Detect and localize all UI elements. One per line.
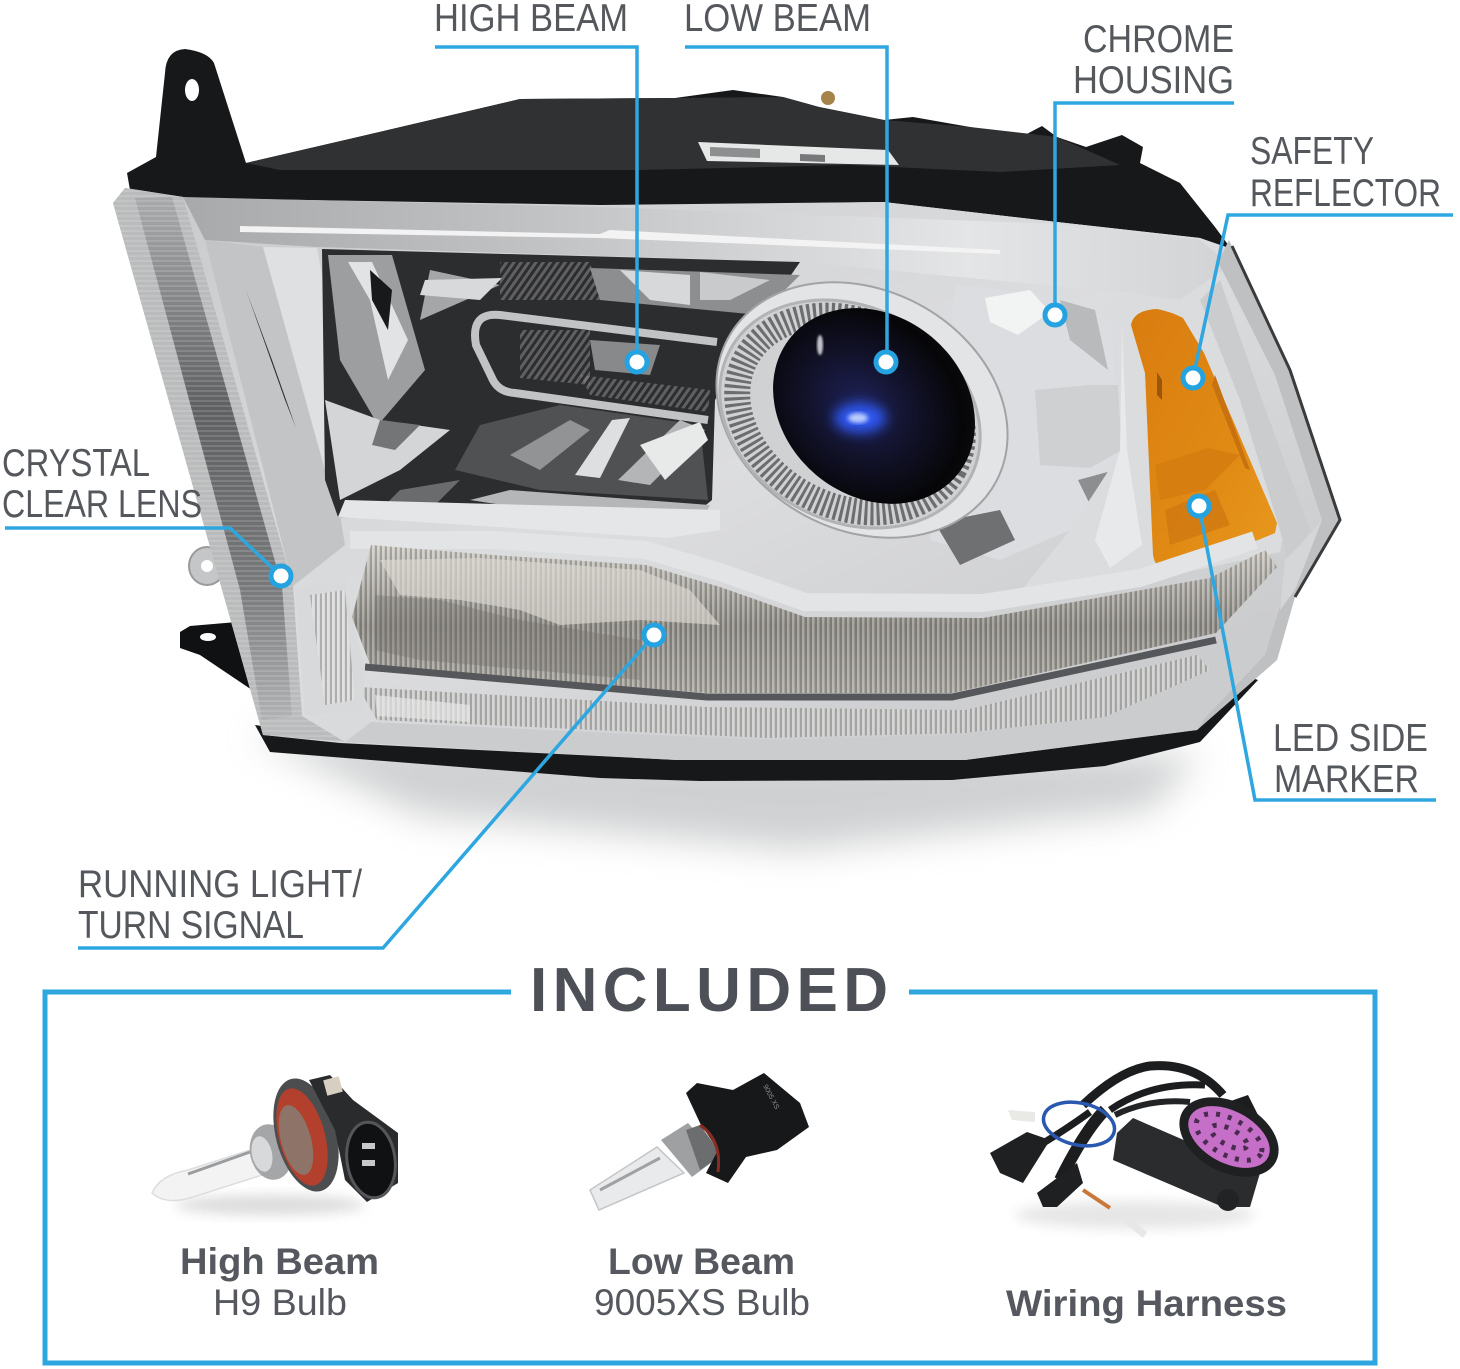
label: chrome housing: HOUSING bbox=[1073, 59, 1234, 102]
label: safety reflector bbox=[1183, 130, 1453, 388]
label: crystal clear lens: CRYSTAL bbox=[2, 442, 150, 485]
caption: 9005XS bulb: 9005XS Bulb bbox=[594, 1282, 810, 1323]
icon: 9005XS bulb bbox=[590, 1073, 809, 1210]
lower black trim bbox=[255, 670, 1258, 781]
right bezel bbox=[1020, 290, 1290, 592]
projector outer ring bbox=[671, 233, 1053, 587]
label: crystal clear lens bbox=[2, 442, 291, 586]
right rim edge bbox=[1197, 240, 1340, 730]
caption: high beam: High Beam bbox=[180, 1241, 379, 1282]
heading: included: INCLUDED bbox=[530, 956, 888, 1025]
amber safety reflector bbox=[1131, 309, 1277, 566]
label: crystal clear lens: CLEAR LENS bbox=[2, 483, 202, 526]
lower bezel sweep band bbox=[350, 540, 1255, 603]
label: LED side marker: MARKER bbox=[1274, 758, 1419, 801]
item: low beam bulb bbox=[590, 1073, 810, 1323]
strip lower dark line bbox=[365, 640, 1216, 697]
upper chrome reflections bbox=[420, 270, 500, 320]
reflector bottom chrome edge bbox=[338, 500, 720, 538]
projector striated ring bbox=[680, 256, 1020, 572]
label: chrome housing: CHROME bbox=[1083, 18, 1234, 61]
projector lens bbox=[733, 268, 1015, 544]
label: LED side marker: LED SIDE bbox=[1273, 717, 1428, 760]
high beam chrome tube bbox=[475, 315, 717, 420]
bottom chrome bar bbox=[345, 610, 1277, 760]
ground shadow bbox=[250, 735, 1200, 850]
label: running light / turn signal bbox=[78, 625, 664, 948]
inner reflector bbox=[520, 330, 590, 385]
icon: wiring harness bbox=[990, 1066, 1292, 1235]
left lens bars bbox=[296, 580, 365, 715]
label sticker bbox=[698, 142, 899, 165]
icon: 9005XS bulb: 9005 XS bbox=[761, 1084, 780, 1111]
label: running light / turn signal: RUNNING LIGHT/ bbox=[78, 863, 362, 906]
lower clear strip bbox=[358, 655, 1210, 738]
icon: H9 bulb bbox=[152, 1071, 400, 1215]
label: low beam bbox=[684, 0, 896, 372]
lower blades bbox=[455, 405, 708, 500]
left lens strip bbox=[113, 188, 345, 742]
reflector cavity bbox=[322, 249, 800, 537]
left mounting ear bbox=[189, 547, 225, 585]
LED running strip bbox=[352, 545, 1277, 693]
projector housing right side bbox=[930, 285, 1124, 565]
label: LED side marker bbox=[1189, 496, 1436, 801]
caption: low beam: Low Beam bbox=[608, 1241, 795, 1282]
panel: included bbox=[45, 956, 1375, 1363]
clear lens and bezel base bbox=[113, 188, 1340, 760]
panel frame bbox=[45, 992, 1375, 1363]
label: high beam bbox=[434, 0, 647, 372]
label: running light / turn signal: TURN SIGNAL bbox=[78, 904, 304, 947]
left reflector chrome bbox=[328, 255, 425, 425]
label: safety reflector: SAFETY bbox=[1250, 130, 1374, 173]
left inner panels bbox=[205, 240, 345, 586]
caption: wiring harness: Wiring Harness bbox=[1006, 1283, 1287, 1324]
caption: H9 bulb: H9 Bulb bbox=[213, 1282, 347, 1323]
headlight assembly illustration bbox=[113, 49, 1340, 850]
label: chrome housing bbox=[1045, 18, 1234, 325]
black rear housing bbox=[127, 49, 1232, 250]
item: high beam bulb bbox=[152, 1071, 400, 1323]
left black mounting tab bbox=[180, 622, 252, 690]
item: wiring harness bbox=[990, 1066, 1292, 1324]
upper chrome bar bbox=[183, 197, 1230, 300]
